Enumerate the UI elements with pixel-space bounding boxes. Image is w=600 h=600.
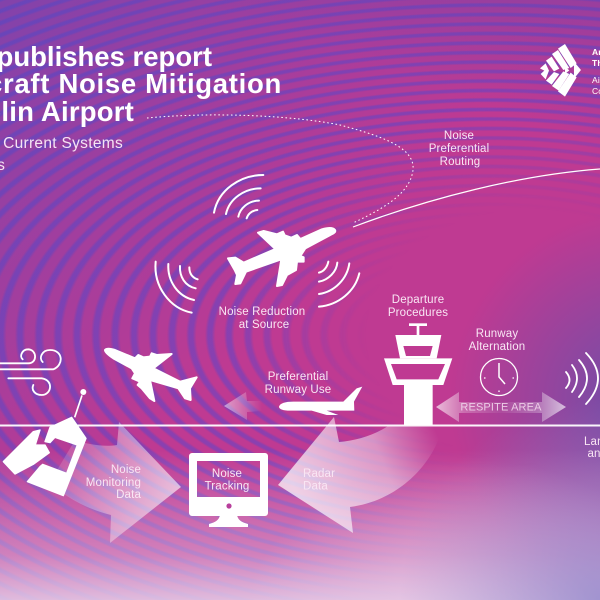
label: runway alternation: Alternation bbox=[469, 341, 525, 353]
subtitle bbox=[0, 135, 123, 174]
label: noise preferential routing: Routing bbox=[440, 156, 480, 168]
icon: sound waves above plane bbox=[214, 175, 263, 218]
logo mark bbox=[540, 44, 581, 97]
icon: control tower bbox=[384, 323, 452, 425]
icon: sound waves left of plane bbox=[155, 262, 198, 313]
label: departure procedures: Departure bbox=[392, 294, 444, 306]
label: radar data: Radar bbox=[303, 468, 335, 480]
label: noise monitoring data: Noise bbox=[111, 464, 141, 476]
icon: monitor bbox=[189, 453, 268, 527]
arrow: preferential runway small arrow bbox=[224, 392, 262, 420]
label: respite area: RESPITE AREA bbox=[460, 402, 542, 414]
label: noise preferential routing: Preferential bbox=[429, 143, 489, 155]
icon: noise meter in hand bbox=[3, 389, 86, 496]
arrow: respite area bbox=[436, 392, 566, 422]
arrow: radar data bbox=[278, 417, 442, 533]
dashed flight route bbox=[147, 115, 413, 223]
logo text bbox=[592, 47, 600, 96]
icon: wind bbox=[0, 349, 61, 395]
label: preferential runway use: Preferential bbox=[268, 371, 328, 383]
title bbox=[0, 41, 282, 127]
label: noise monitoring data: Monitoring bbox=[86, 477, 141, 489]
label: runway alternation: Runway bbox=[476, 328, 518, 340]
label: noise tracking: Tracking bbox=[205, 480, 249, 492]
label: radar data: Data bbox=[303, 480, 328, 492]
label: noise monitoring data: Data bbox=[116, 489, 141, 501]
label: noise tracking: Noise bbox=[212, 468, 242, 480]
label: noise reduction at source: Noise Reduction bbox=[219, 306, 305, 318]
label: preferential runway use: Runway Use bbox=[265, 384, 331, 396]
arrow: noise monitoring data bbox=[50, 422, 181, 543]
label: noise reduction at source: at Source bbox=[239, 319, 289, 331]
ground line bbox=[0, 424, 600, 426]
icon: departing plane bbox=[228, 228, 335, 286]
preferred flight route bbox=[353, 169, 600, 227]
icon: landing plane bbox=[279, 387, 362, 415]
label: departure procedures: Procedures bbox=[388, 307, 448, 319]
label: noise preferential routing: Noise bbox=[444, 130, 474, 142]
icon: sound waves right bbox=[566, 353, 598, 404]
icon: arriving plane bbox=[105, 349, 197, 401]
icon: clock bbox=[480, 358, 518, 396]
icon: sound waves right of plane bbox=[319, 262, 359, 307]
